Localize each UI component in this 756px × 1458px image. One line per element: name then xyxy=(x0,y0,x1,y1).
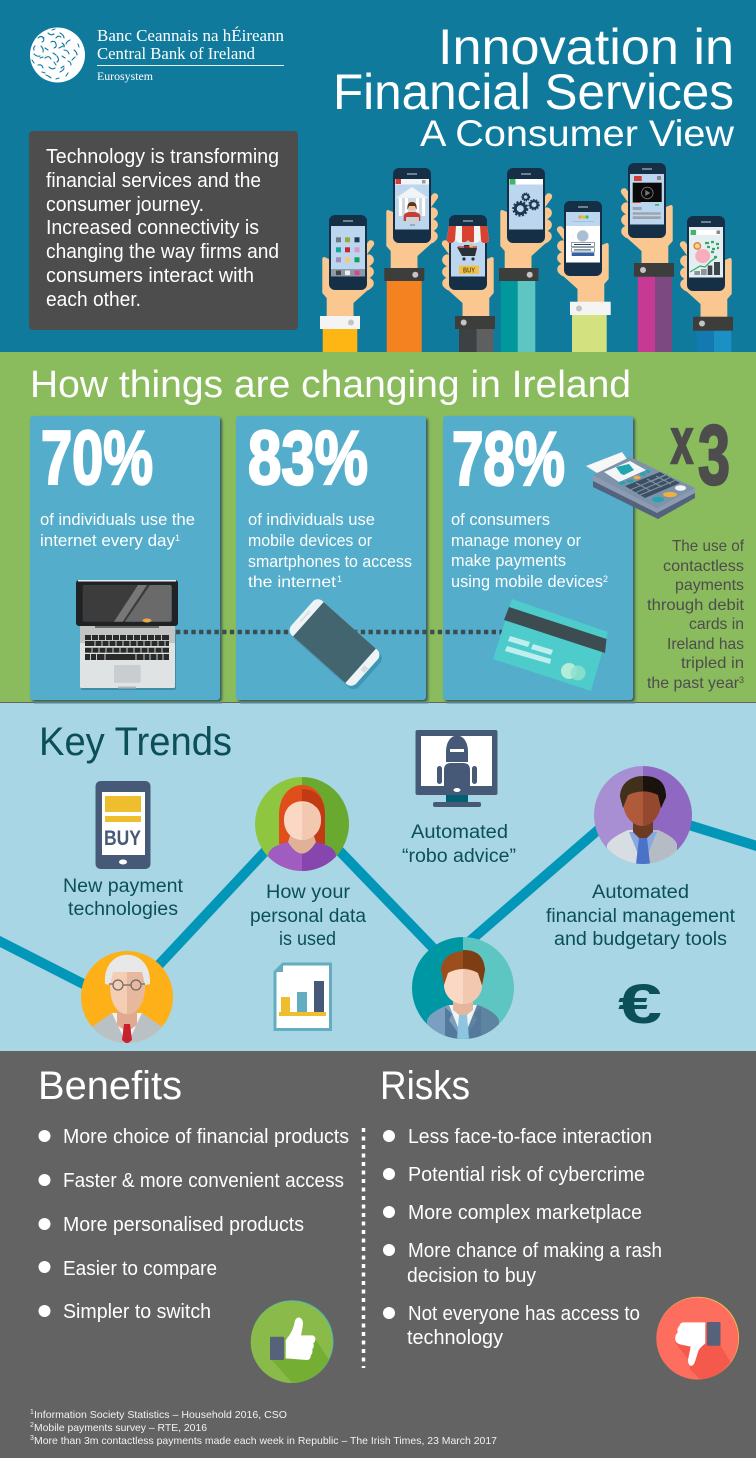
label: robo advice: Automated xyxy=(411,822,508,843)
icon: thumbs down xyxy=(656,1296,740,1380)
label: personal data: is used xyxy=(279,929,336,950)
label: personal data xyxy=(250,882,366,950)
contactless text: through debit xyxy=(647,597,745,614)
dotted connector xyxy=(176,630,505,634)
contactless text: 3 xyxy=(739,675,744,685)
benefits list: Faster & more convenient access xyxy=(63,1170,344,1192)
risks list: More chance of making a rash xyxy=(408,1240,662,1262)
stat card: 78%: of consumers xyxy=(451,511,550,529)
risks list: Not everyone has access to xyxy=(408,1303,640,1325)
person: older man xyxy=(80,950,174,1045)
hand 3: shop phone: BUY xyxy=(463,268,475,274)
label: budgeting tools: financial management xyxy=(546,906,736,927)
stat card: 78% xyxy=(443,416,633,700)
hand 6: video phone xyxy=(619,163,674,352)
contactless text: the past year xyxy=(647,675,740,692)
risks list: Potential risk of cybercrime xyxy=(408,1164,645,1186)
risks list: technology xyxy=(407,1327,503,1349)
label: new payment technologies xyxy=(63,876,184,920)
stat card: 70%: internet every day xyxy=(40,532,176,550)
contactless text: contactless xyxy=(663,558,744,575)
stat card: 83%: 1 xyxy=(337,574,342,584)
stat card: 78%: manage money or xyxy=(451,532,581,550)
footnotes: 3 xyxy=(30,1435,34,1442)
multiplier: x3: x xyxy=(671,405,693,477)
risks heading: Risks xyxy=(380,1064,470,1108)
stat card: 78%: make payments xyxy=(451,552,566,570)
multiplier: x3: 3 xyxy=(698,408,730,502)
icon: euro: € xyxy=(618,972,662,1035)
risks list: decision to buy xyxy=(407,1265,536,1287)
contactless text: payments xyxy=(675,577,744,594)
panel: header xyxy=(0,0,756,352)
contactless text xyxy=(647,538,745,692)
label: budgeting tools: and budgetary tools xyxy=(554,929,727,950)
panel: key trends xyxy=(0,702,756,1051)
intro text box: consumer journey. xyxy=(46,194,204,216)
stat card: 83%: of individuals use xyxy=(248,511,375,529)
hand 3: shop phone xyxy=(440,215,495,352)
label: budgeting tools: Automated xyxy=(592,882,689,903)
icon: buy on phone: BUY xyxy=(104,827,141,850)
intro text box: consumers interact with xyxy=(46,265,254,287)
stat card: 70%: 70% xyxy=(41,416,153,501)
intro text box xyxy=(29,131,298,330)
stat card: 83%: 83% xyxy=(248,416,368,501)
hand 1: app grid phone xyxy=(320,215,376,352)
intro text box: each other. xyxy=(46,289,141,311)
logo wordmark: Banc Ceannais na hÉireann xyxy=(97,26,284,45)
icon: smartphone xyxy=(287,596,385,692)
icon: robot on monitor xyxy=(416,730,498,807)
column divider xyxy=(362,1128,365,1368)
logo wordmark: Eurosystem xyxy=(97,69,154,83)
person: woman xyxy=(255,777,349,871)
stat card: 70%: of individuals use the xyxy=(40,511,195,529)
stat card: 78%: 2 xyxy=(603,574,608,584)
footnotes: Mobile payments survey – RTE, 2016 xyxy=(34,1422,207,1434)
stat card: 83%: smartphones to access xyxy=(248,553,412,571)
hand 5: login phone xyxy=(555,201,611,352)
title: Financial Services xyxy=(333,64,734,120)
benefits list: More personalised products xyxy=(63,1214,304,1236)
title: Innovation in xyxy=(438,19,734,75)
panel: benefits and risks xyxy=(30,1070,740,1446)
hand 2: bank phone xyxy=(384,168,440,352)
icon: card payment terminal xyxy=(586,452,695,519)
contactless text: tripled in xyxy=(681,655,744,672)
intro text box: changing the way firms and xyxy=(46,241,279,263)
label: personal data: How your xyxy=(266,882,351,903)
icon: thumbs up xyxy=(250,1300,334,1383)
icon: document with bar chart xyxy=(275,964,330,1030)
illustration: raised hands holding phones xyxy=(320,163,733,352)
benefits list xyxy=(38,1126,349,1323)
footnotes: Information Society Statistics – Household 2016, CSO xyxy=(34,1409,287,1421)
stat card: 78%: using mobile devices xyxy=(451,573,603,591)
contactless text: Ireland has xyxy=(667,636,744,653)
intro text box: financial services and the xyxy=(46,170,261,192)
logo globe xyxy=(30,28,85,82)
stat card: 70% xyxy=(30,416,220,700)
hand 4: settings phone xyxy=(499,168,554,352)
label: robo advice xyxy=(402,822,516,867)
section heading: How things are changing in Ireland xyxy=(30,364,631,406)
intro text box: Increased connectivity is xyxy=(46,217,259,239)
intro text box: Technology is transforming xyxy=(46,146,279,168)
section heading: Key Trends xyxy=(39,720,232,764)
stat card: 70%: 1 xyxy=(175,533,180,543)
hand 7: savings phone xyxy=(678,216,733,352)
label: new payment technologies: technologies xyxy=(68,899,178,920)
person: young man xyxy=(412,937,514,1040)
logo wordmark: Central Bank of Ireland xyxy=(97,44,256,63)
icon: laptop xyxy=(76,580,178,690)
risks list xyxy=(383,1126,662,1349)
icon: bank card xyxy=(493,599,608,691)
icon: buy on phone xyxy=(96,781,150,869)
label: budgeting tools xyxy=(546,882,736,950)
footnotes: 1 xyxy=(30,1409,34,1416)
title xyxy=(333,19,734,154)
risks list: More complex marketplace xyxy=(408,1202,642,1224)
footnotes: More than 3m contactless payments made each week in Republic – The Irish Times, 23 March 2017 xyxy=(34,1435,497,1447)
trend line xyxy=(0,791,756,999)
label: new payment technologies: New payment xyxy=(63,876,184,897)
benefits list: More choice of financial products xyxy=(63,1126,349,1148)
benefits list: Easier to compare xyxy=(63,1258,217,1280)
panel: how things are changing xyxy=(0,352,756,702)
logo wordmark xyxy=(97,26,284,83)
multiplier: x3 xyxy=(671,405,730,502)
contactless text: The use of xyxy=(672,538,745,555)
logo: Central Bank of Ireland xyxy=(30,26,284,83)
card shadow remnants along the section edge xyxy=(34,702,635,704)
risks list: Less face-to-face interaction xyxy=(408,1126,652,1148)
stat card: 78%: 78% xyxy=(452,417,565,502)
stat card: 83% xyxy=(236,416,426,700)
contactless text: cards in xyxy=(689,616,744,633)
title: A Consumer View xyxy=(420,113,734,154)
stat card: 83%: mobile devices or xyxy=(248,532,372,550)
benefits heading: Benefits xyxy=(38,1064,182,1108)
footnotes: 2 xyxy=(30,1422,34,1429)
footnotes xyxy=(30,1409,497,1447)
label: robo advice: “robo advice” xyxy=(402,846,516,867)
label: personal data: personal data xyxy=(250,906,366,927)
stat card: 83%: the internet xyxy=(248,574,337,591)
benefits list: Simpler to switch xyxy=(63,1301,211,1323)
person: man with dark hair xyxy=(594,766,692,866)
